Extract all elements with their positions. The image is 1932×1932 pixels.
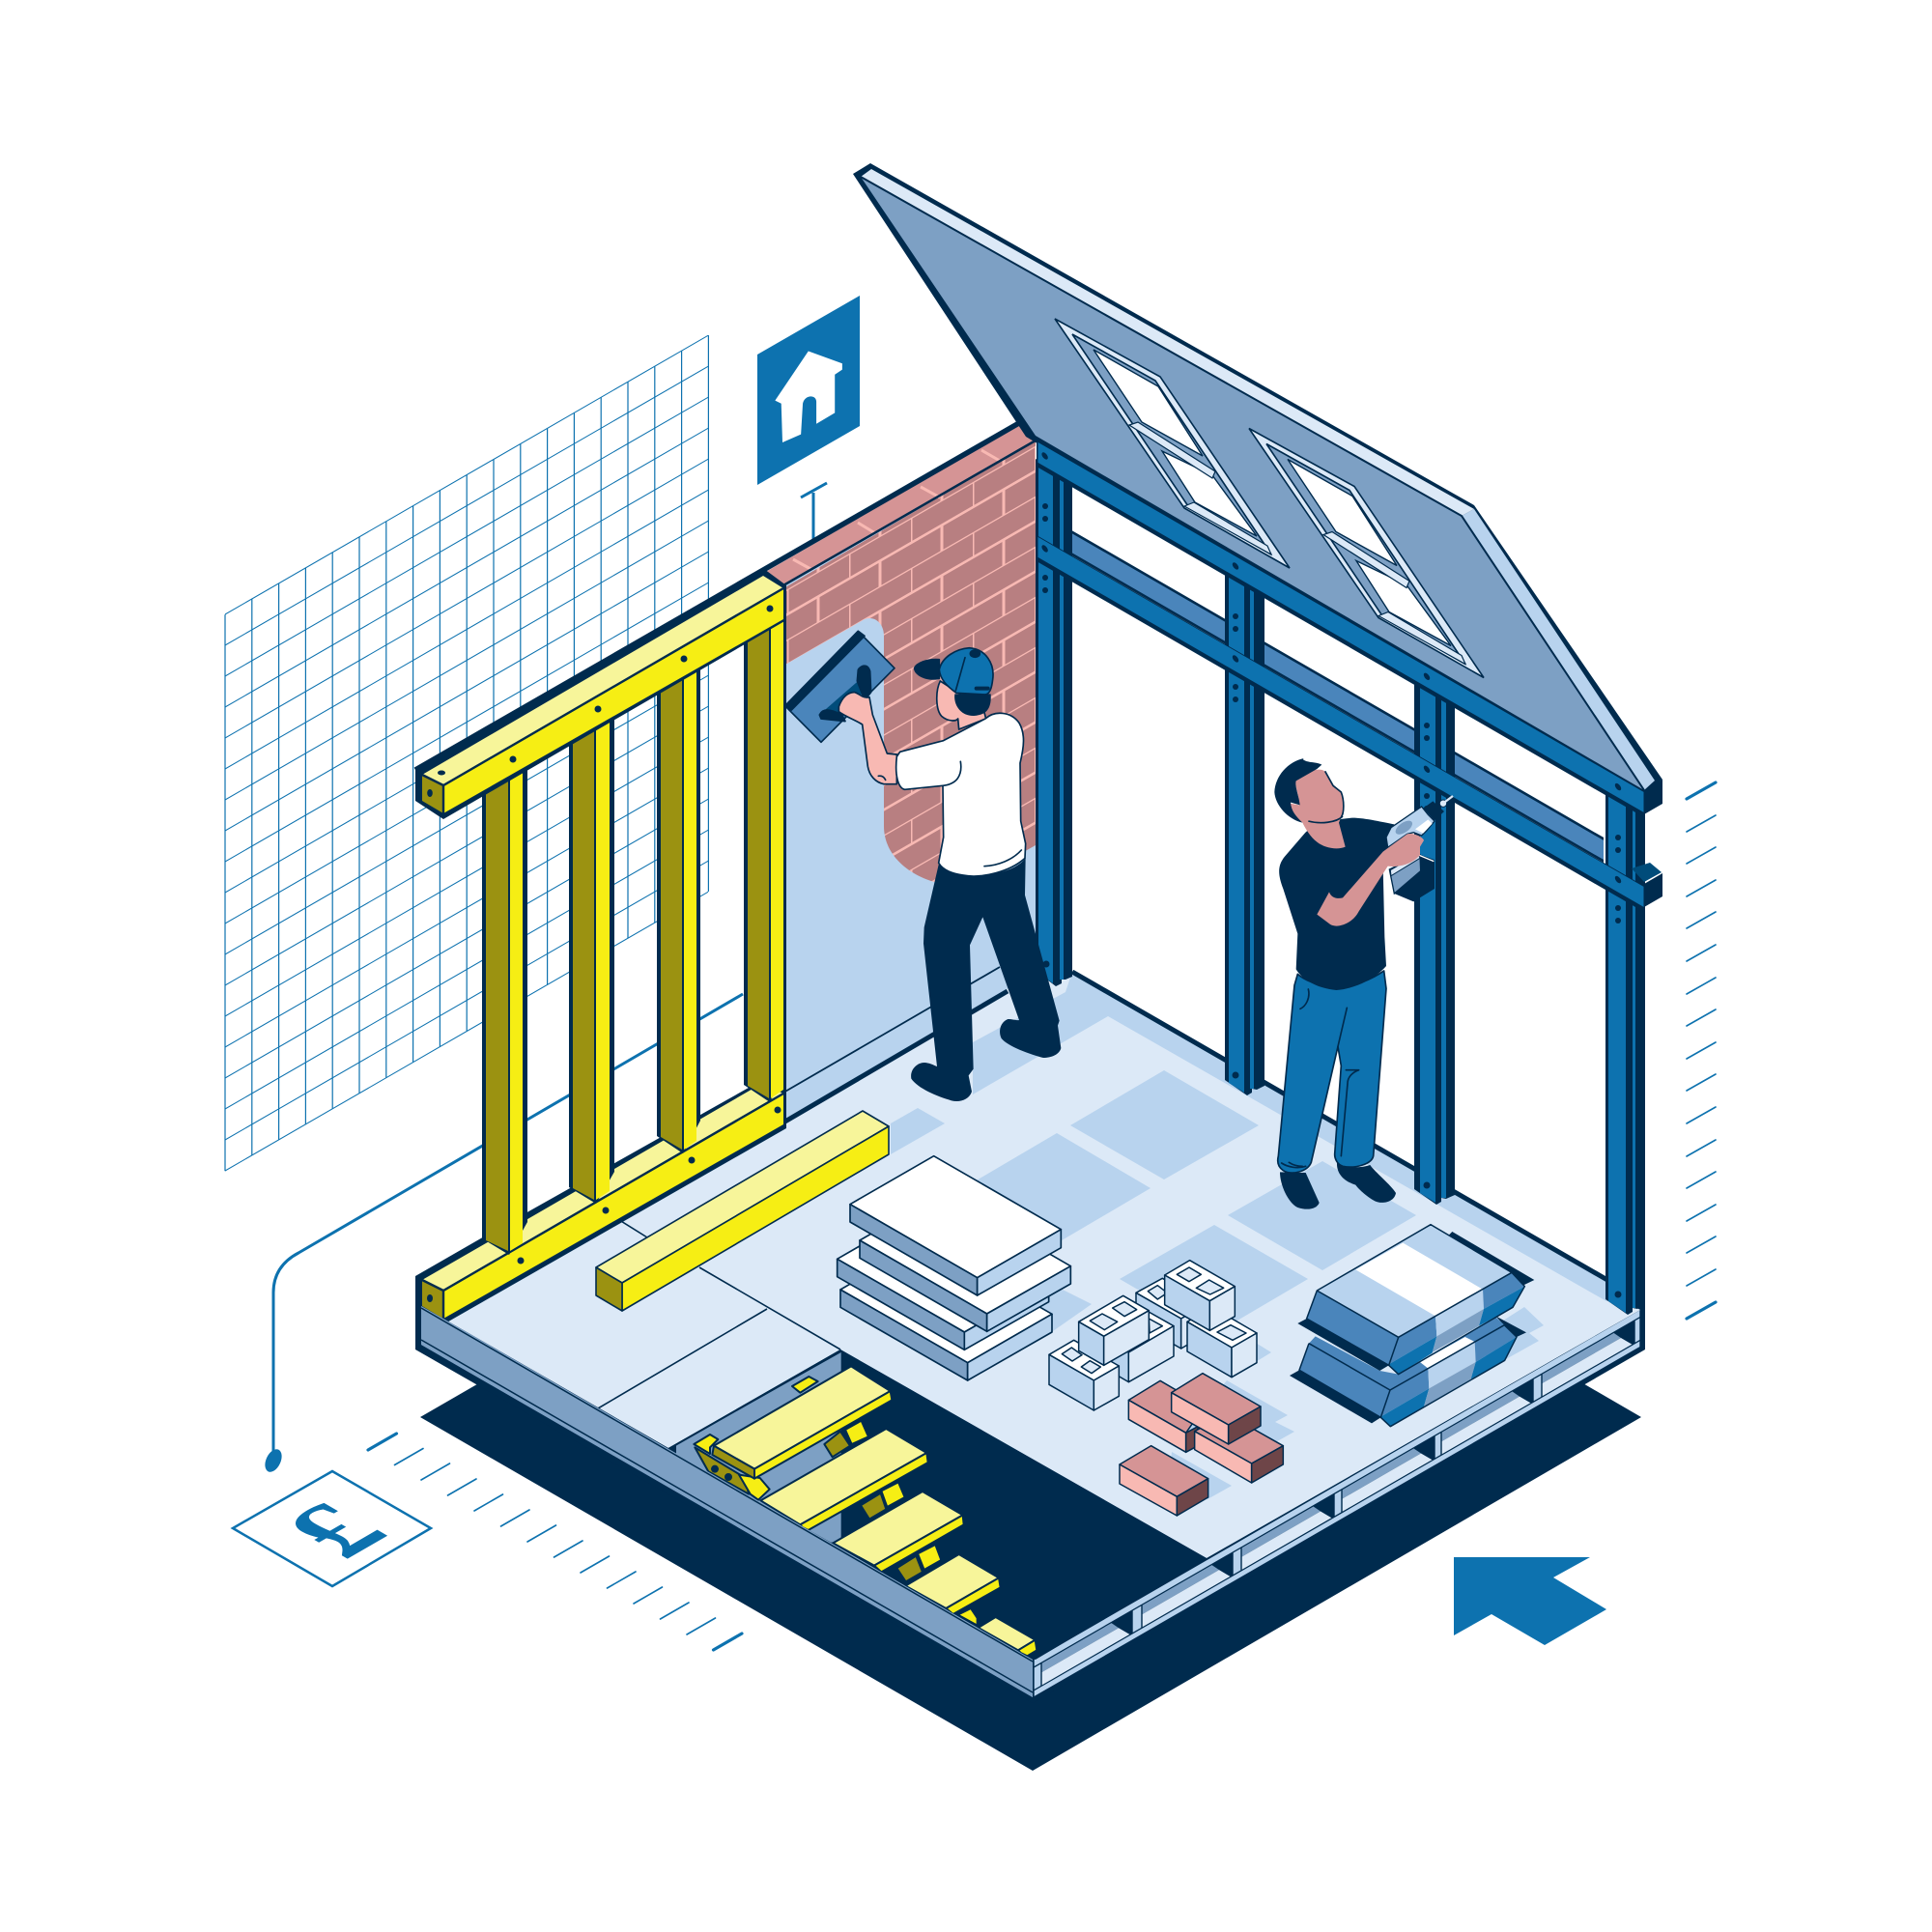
top rail	[415, 569, 786, 819]
shirt	[896, 713, 1026, 876]
roof window 2	[1249, 429, 1484, 678]
joists	[824, 1421, 978, 1626]
wall to floor junction	[783, 972, 1633, 1294]
worker 1 legs	[911, 858, 1061, 1101]
floor seam lines	[598, 1218, 840, 1408]
measure ticks: right	[1687, 782, 1716, 1319]
roof window 1	[1055, 319, 1290, 568]
post 2	[1225, 568, 1264, 1095]
block E	[1165, 1261, 1235, 1330]
floor joists and planks	[694, 1366, 1037, 1656]
block D	[1136, 1278, 1208, 1349]
trowel	[785, 631, 895, 742]
plastered wall with exposed bricks	[415, 420, 1036, 1121]
worker 2 upper body	[1274, 758, 1453, 990]
worker 2: drilling	[1274, 758, 1453, 1209]
stud 1	[482, 765, 527, 1255]
block F	[1187, 1307, 1257, 1378]
brick A	[1128, 1380, 1205, 1452]
block A	[1049, 1340, 1119, 1410]
stud 2	[569, 716, 614, 1204]
icon: house sign	[757, 296, 860, 539]
cement bags	[1290, 1225, 1534, 1427]
joist bracket	[694, 1377, 818, 1500]
floor tiles and shadows	[891, 972, 1633, 1499]
brick C	[1195, 1413, 1283, 1483]
board 3	[838, 1210, 1049, 1350]
wire mesh panel	[225, 335, 708, 1171]
plank 5	[979, 1617, 1037, 1656]
plank 1	[712, 1366, 892, 1479]
drill battery	[1389, 854, 1435, 901]
floor base: open right side with studs	[1033, 1304, 1645, 1703]
cap	[915, 648, 993, 695]
concrete blocks	[1049, 1261, 1257, 1410]
stud 4	[744, 614, 786, 1102]
board 2	[860, 1192, 1070, 1331]
plank 3	[833, 1492, 964, 1572]
frame beams	[1037, 440, 1644, 912]
ground shadow	[420, 1064, 1641, 1771]
brick D	[1120, 1446, 1208, 1516]
worker 2 legs	[1278, 971, 1396, 1209]
yellow timber wall	[415, 569, 786, 1324]
board 4	[840, 1241, 1052, 1380]
post 3	[1414, 677, 1455, 1205]
loose timber beam	[596, 1111, 889, 1311]
upper bag	[1297, 1225, 1534, 1375]
floor base: front left strip	[415, 1276, 1033, 1703]
frame flanges	[1065, 526, 1604, 863]
plank 2	[760, 1429, 928, 1530]
block C	[1090, 1304, 1174, 1382]
stud 3	[657, 665, 700, 1153]
head	[1290, 770, 1346, 848]
drill	[1386, 796, 1453, 847]
post 4	[1605, 787, 1645, 1315]
arrow	[1454, 1557, 1606, 1645]
floor hole	[668, 1350, 1207, 1660]
neck and face	[937, 681, 986, 729]
icon: pound sign tile	[233, 1471, 431, 1586]
beam end caps	[1632, 780, 1662, 907]
block B	[1079, 1295, 1149, 1365]
roof panel	[853, 163, 1662, 792]
front strip top edge over planks	[421, 1306, 1033, 1697]
arm	[838, 693, 896, 784]
brick B	[1172, 1374, 1261, 1444]
arm	[1317, 834, 1424, 926]
post 1	[1036, 459, 1072, 986]
plank 4	[905, 1554, 1001, 1614]
bottom rail	[415, 1066, 786, 1324]
shirt	[1279, 818, 1394, 990]
wire connector line	[262, 994, 743, 1474]
bricks	[1120, 1374, 1283, 1516]
hair	[1274, 758, 1321, 823]
blue steel frame	[1036, 440, 1662, 1315]
floor surface	[443, 967, 1640, 1558]
measure ticks: bottom	[368, 1434, 742, 1650]
stacked boards	[838, 1156, 1070, 1380]
board 1	[850, 1156, 1061, 1295]
icon: pound sign tile: £	[261, 1486, 412, 1574]
worker 1: plastering	[785, 631, 1061, 1101]
lower bag	[1290, 1316, 1526, 1427]
worker 1 upper body	[785, 631, 1026, 876]
hair	[954, 694, 991, 716]
